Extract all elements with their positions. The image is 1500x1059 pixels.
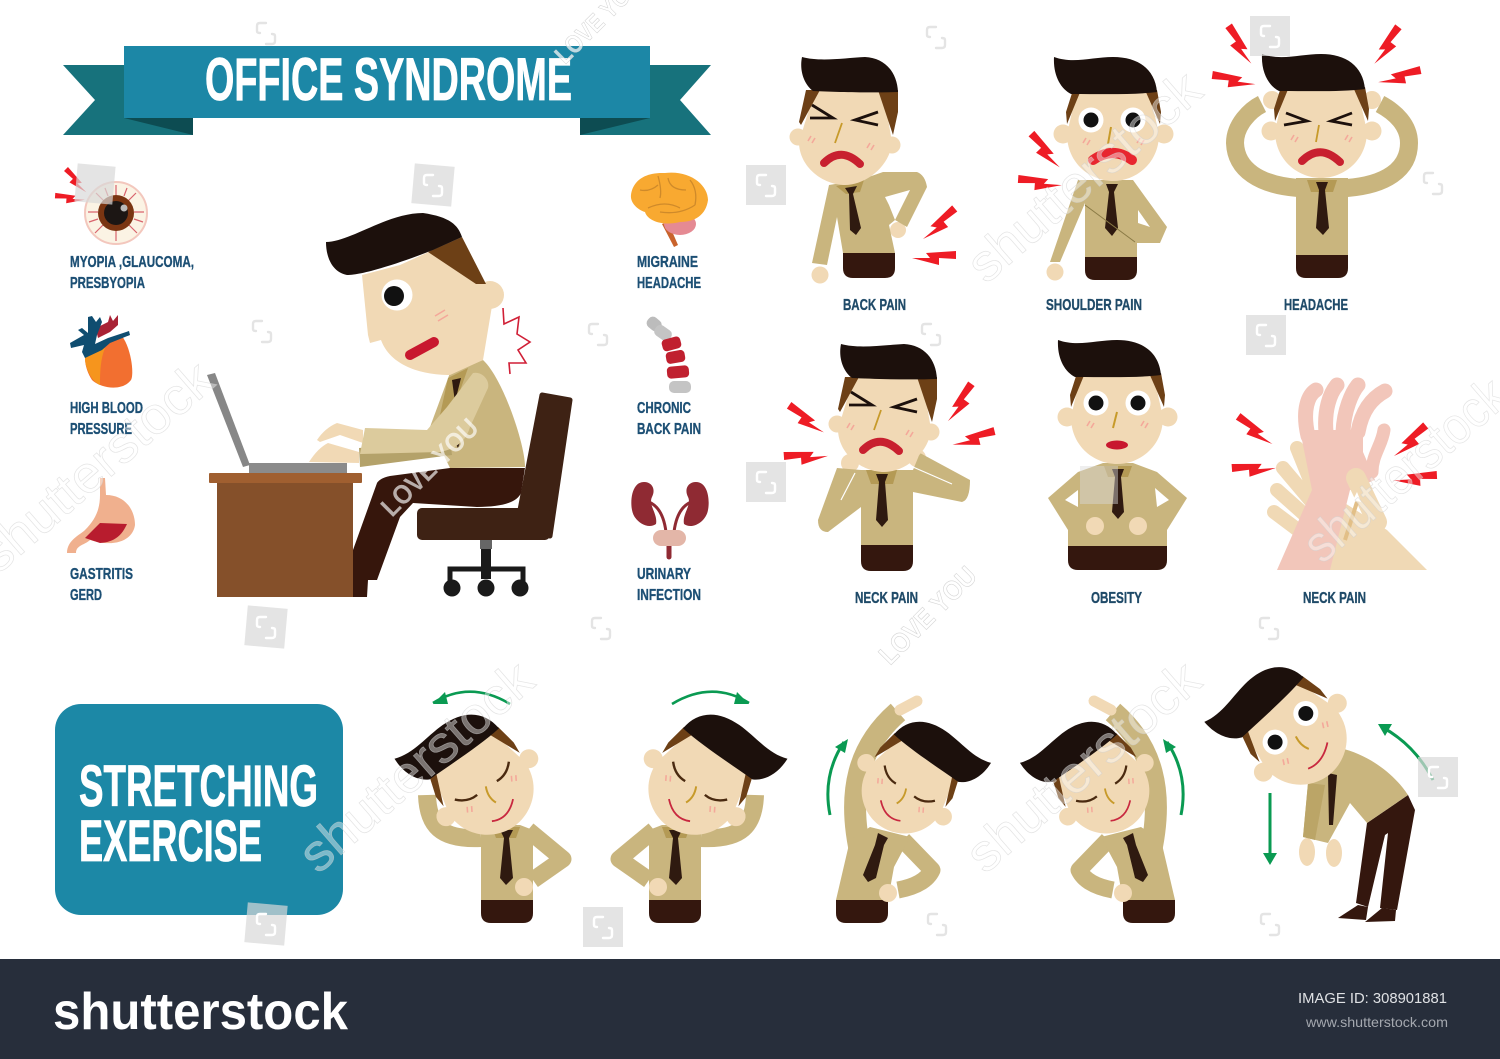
figure: back pain [790,57,961,284]
stretch figure 2 [618,690,788,923]
icon: brain [631,173,708,247]
label: neck pain (wrist): NECK PAIN [1303,590,1366,607]
watermark text: shutterstock [288,649,546,884]
figure: wrist pain [1232,385,1437,570]
label: shoulder pain: SHOULDER PAIN [1046,297,1142,314]
icon: spine [645,315,691,393]
label: neck pain: NECK PAIN [855,590,918,607]
label: high blood pressure [70,400,143,438]
label: headache: HEADACHE [1284,297,1348,314]
head [326,213,504,375]
icon: heart [70,315,132,388]
footer logo: shutterstock [53,983,348,1041]
label: gastritis [70,566,133,604]
title: OFFICE SYNDROME [205,46,572,113]
label: eye conditions: PRESBYOPIA [70,275,145,292]
stretch figure 1 [394,690,564,923]
watermark text: shutterstock [955,649,1213,884]
stretch figure 3 [828,699,991,923]
icon: neck pain zigzag [503,308,530,374]
icon: stomach [67,478,135,553]
label: urinary infection: URINARY [637,566,691,583]
panel: stretching exercise: STRETCHING [79,754,318,819]
label: urinary infection: INFECTION [637,587,701,604]
label: gastritis: GASTRITIS [70,566,133,583]
watermark text: LOVE YOU [873,561,983,670]
label: chronic back pain: CHRONIC [637,400,691,417]
banner [63,46,711,135]
watermark text: LOVE YOU [375,413,485,522]
label: chronic back pain: BACK PAIN [637,421,701,438]
footer image id: IMAGE ID: 308901881 [1298,990,1447,1007]
panel: stretching exercise [55,704,343,915]
footer bar [0,959,1500,1059]
label: eye conditions [70,254,194,292]
label: back pain: BACK PAIN [843,297,906,314]
figure: neck pain [784,344,997,571]
label: obesity: OBESITY [1091,590,1142,607]
label: migraine: MIGRAINE [637,254,698,271]
label: chronic back pain [637,400,701,438]
panel: stretching exercise: EXERCISE [79,809,262,874]
icon: eye [55,167,147,244]
label: migraine [637,254,701,292]
footer url: www.shutterstock.com [1305,1014,1448,1030]
watermark text: shutterstock [956,59,1214,294]
figure: headache [1211,24,1423,278]
label: urinary infection [637,566,701,604]
label: gastritis: GERD [70,587,102,604]
stretch figure 4 [1020,699,1183,923]
label: high blood pressure: HIGH BLOOD [70,400,143,417]
stretch figure 5: forward bend [1204,640,1433,922]
figure: shoulder pain [1017,57,1174,280]
figure: obesity [1048,340,1187,570]
label: migraine: HEADACHE [637,275,701,292]
label: high blood pressure: PRESSURE [70,421,132,438]
label: eye conditions: MYOPIA ,GLAUCOMA, [70,254,194,271]
main figure: man at desk [207,213,570,597]
icon: kidneys [631,482,709,557]
